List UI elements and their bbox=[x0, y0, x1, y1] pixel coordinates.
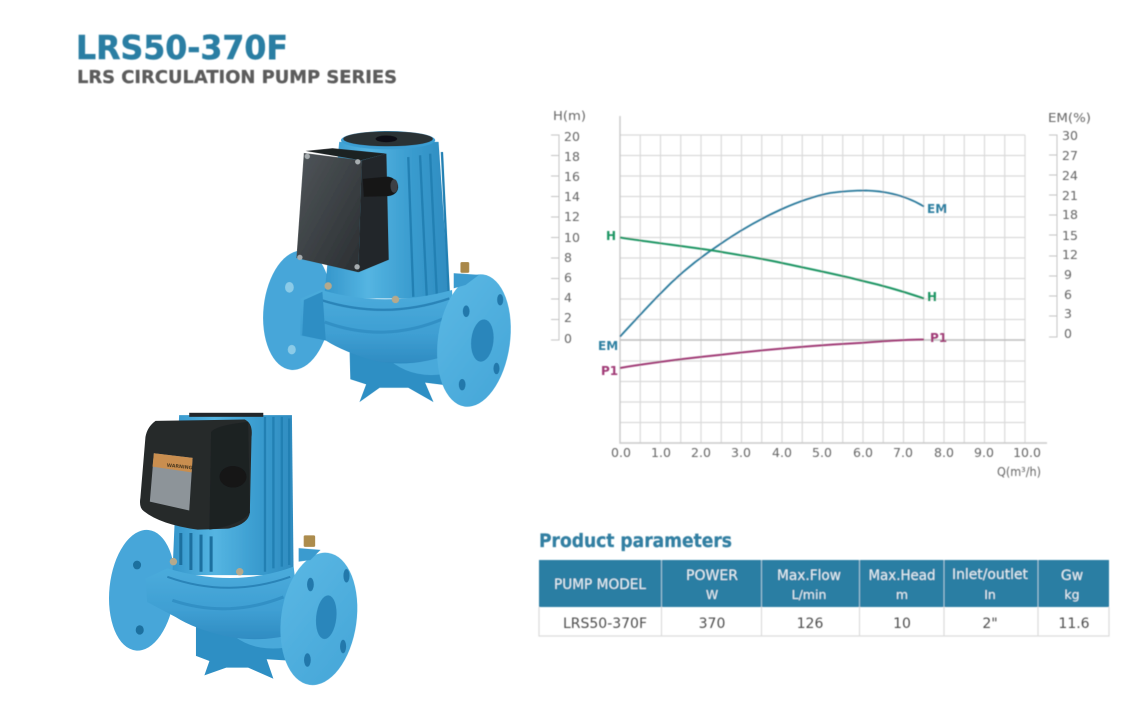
curve labels bbox=[598, 202, 947, 378]
motor housing with fins bbox=[172, 413, 294, 575]
volute body bbox=[301, 282, 455, 364]
table header row: kg bbox=[1064, 587, 1080, 602]
parameters table bbox=[539, 560, 1109, 636]
table header row: PUMP MODEL bbox=[554, 577, 646, 593]
cable gland bbox=[363, 177, 398, 197]
warning label bbox=[150, 453, 193, 510]
table header row: W bbox=[706, 587, 718, 602]
title: LRS50-370F bbox=[76, 28, 288, 67]
terminal box bbox=[140, 420, 252, 530]
pump photo: lower unit bbox=[103, 413, 365, 690]
subtitle: LRS CIRCULATION PUMP SERIES bbox=[77, 67, 397, 88]
left flange bbox=[257, 247, 337, 373]
right flange bbox=[272, 548, 365, 690]
curve H bbox=[620, 238, 924, 298]
volute body bbox=[145, 558, 302, 639]
pump photo: upper unit bbox=[257, 131, 519, 412]
left axis H(m): 0 bbox=[564, 331, 572, 346]
x axis Q: 8.0 bbox=[934, 445, 954, 460]
curve P1 bbox=[620, 340, 924, 368]
table heading: Product parameters bbox=[539, 530, 732, 552]
x axis Q: 9.0 bbox=[974, 445, 994, 460]
right axis EM(%): 18 bbox=[1062, 207, 1078, 222]
x axis Q: 4.0 bbox=[772, 445, 792, 460]
table data row: LRS50-370F bbox=[563, 616, 647, 632]
curve labels: P1 bbox=[930, 331, 947, 345]
table header row bbox=[539, 560, 1109, 607]
right axis EM(%): 21 bbox=[1062, 188, 1078, 203]
x axis Q: 10.0 bbox=[1013, 445, 1041, 460]
table header row: In bbox=[984, 587, 996, 602]
table header row: L/min bbox=[792, 587, 826, 602]
table header row: m bbox=[896, 587, 908, 602]
right flange bbox=[429, 270, 519, 412]
table data row bbox=[539, 607, 1109, 636]
left axis H(m): 14 bbox=[564, 189, 580, 204]
warning label: WARNING bbox=[166, 463, 193, 471]
x axis Q: 6.0 bbox=[853, 445, 873, 460]
curve EM bbox=[620, 190, 924, 337]
right axis EM(%) bbox=[1048, 110, 1091, 341]
table data row: 10 bbox=[893, 616, 911, 632]
table header row: Inlet/outlet bbox=[952, 567, 1028, 583]
table header row: POWER bbox=[686, 568, 738, 584]
terminal box bbox=[296, 148, 389, 272]
right axis EM(%): 12 bbox=[1062, 247, 1078, 262]
brass vent plug bbox=[454, 262, 479, 288]
table header row: Max.Head bbox=[868, 568, 936, 584]
x axis Q: 2.0 bbox=[691, 445, 711, 460]
table header row: Gw bbox=[1061, 568, 1083, 584]
table data row: 11.6 bbox=[1058, 616, 1090, 632]
curve labels: P1 bbox=[601, 364, 618, 378]
x axis Q: 3.0 bbox=[731, 445, 751, 460]
pump foot bbox=[349, 342, 452, 402]
left axis H(m): 20 bbox=[564, 129, 580, 144]
table data row: 370 bbox=[699, 616, 725, 632]
curve labels: H bbox=[606, 229, 616, 243]
x axis Q: 0.0 bbox=[611, 445, 631, 460]
pump foot bbox=[196, 619, 295, 679]
left axis H(m): 4 bbox=[564, 290, 572, 305]
x axis Q: 1.0 bbox=[651, 445, 671, 460]
left axis H(m): 8 bbox=[564, 250, 572, 265]
right axis EM(%): 0 bbox=[1064, 326, 1072, 341]
x axis Q: Q(m³/h) bbox=[997, 464, 1041, 479]
left axis H(m): 2 bbox=[564, 310, 572, 325]
chart grid bbox=[620, 116, 1047, 443]
left axis H(m): 10 bbox=[564, 230, 580, 245]
left flange bbox=[103, 527, 181, 654]
performance chart bbox=[551, 108, 1091, 479]
table data row: 2" bbox=[982, 616, 998, 632]
curve labels: EM bbox=[927, 202, 947, 216]
top cap bbox=[341, 131, 435, 149]
right axis EM(%): 27 bbox=[1062, 148, 1078, 163]
curve labels: EM bbox=[598, 339, 618, 353]
left axis H(m): 16 bbox=[564, 169, 580, 184]
left axis H(m): 6 bbox=[564, 270, 572, 285]
right axis EM(%): EM(%) bbox=[1048, 110, 1091, 125]
right axis EM(%): 6 bbox=[1064, 287, 1072, 302]
table header row: Max.Flow bbox=[777, 568, 841, 584]
left axis H(m) bbox=[551, 108, 586, 346]
right axis EM(%): 15 bbox=[1062, 228, 1078, 243]
motor housing with fins bbox=[324, 142, 449, 298]
right axis EM(%): 24 bbox=[1062, 168, 1078, 183]
x axis Q: 7.0 bbox=[893, 445, 913, 460]
x axis Q bbox=[611, 445, 1041, 479]
left axis H(m): 18 bbox=[564, 149, 580, 164]
left axis H(m): 12 bbox=[564, 209, 580, 224]
table data row: 126 bbox=[797, 616, 823, 632]
right axis EM(%): 9 bbox=[1064, 267, 1072, 282]
brass vent plug bbox=[299, 535, 321, 562]
left axis H(m): H(m) bbox=[553, 108, 586, 123]
right axis EM(%): 3 bbox=[1064, 306, 1072, 321]
x axis Q: 5.0 bbox=[812, 445, 832, 460]
right axis EM(%): 30 bbox=[1062, 128, 1078, 143]
curve labels: H bbox=[927, 290, 937, 304]
